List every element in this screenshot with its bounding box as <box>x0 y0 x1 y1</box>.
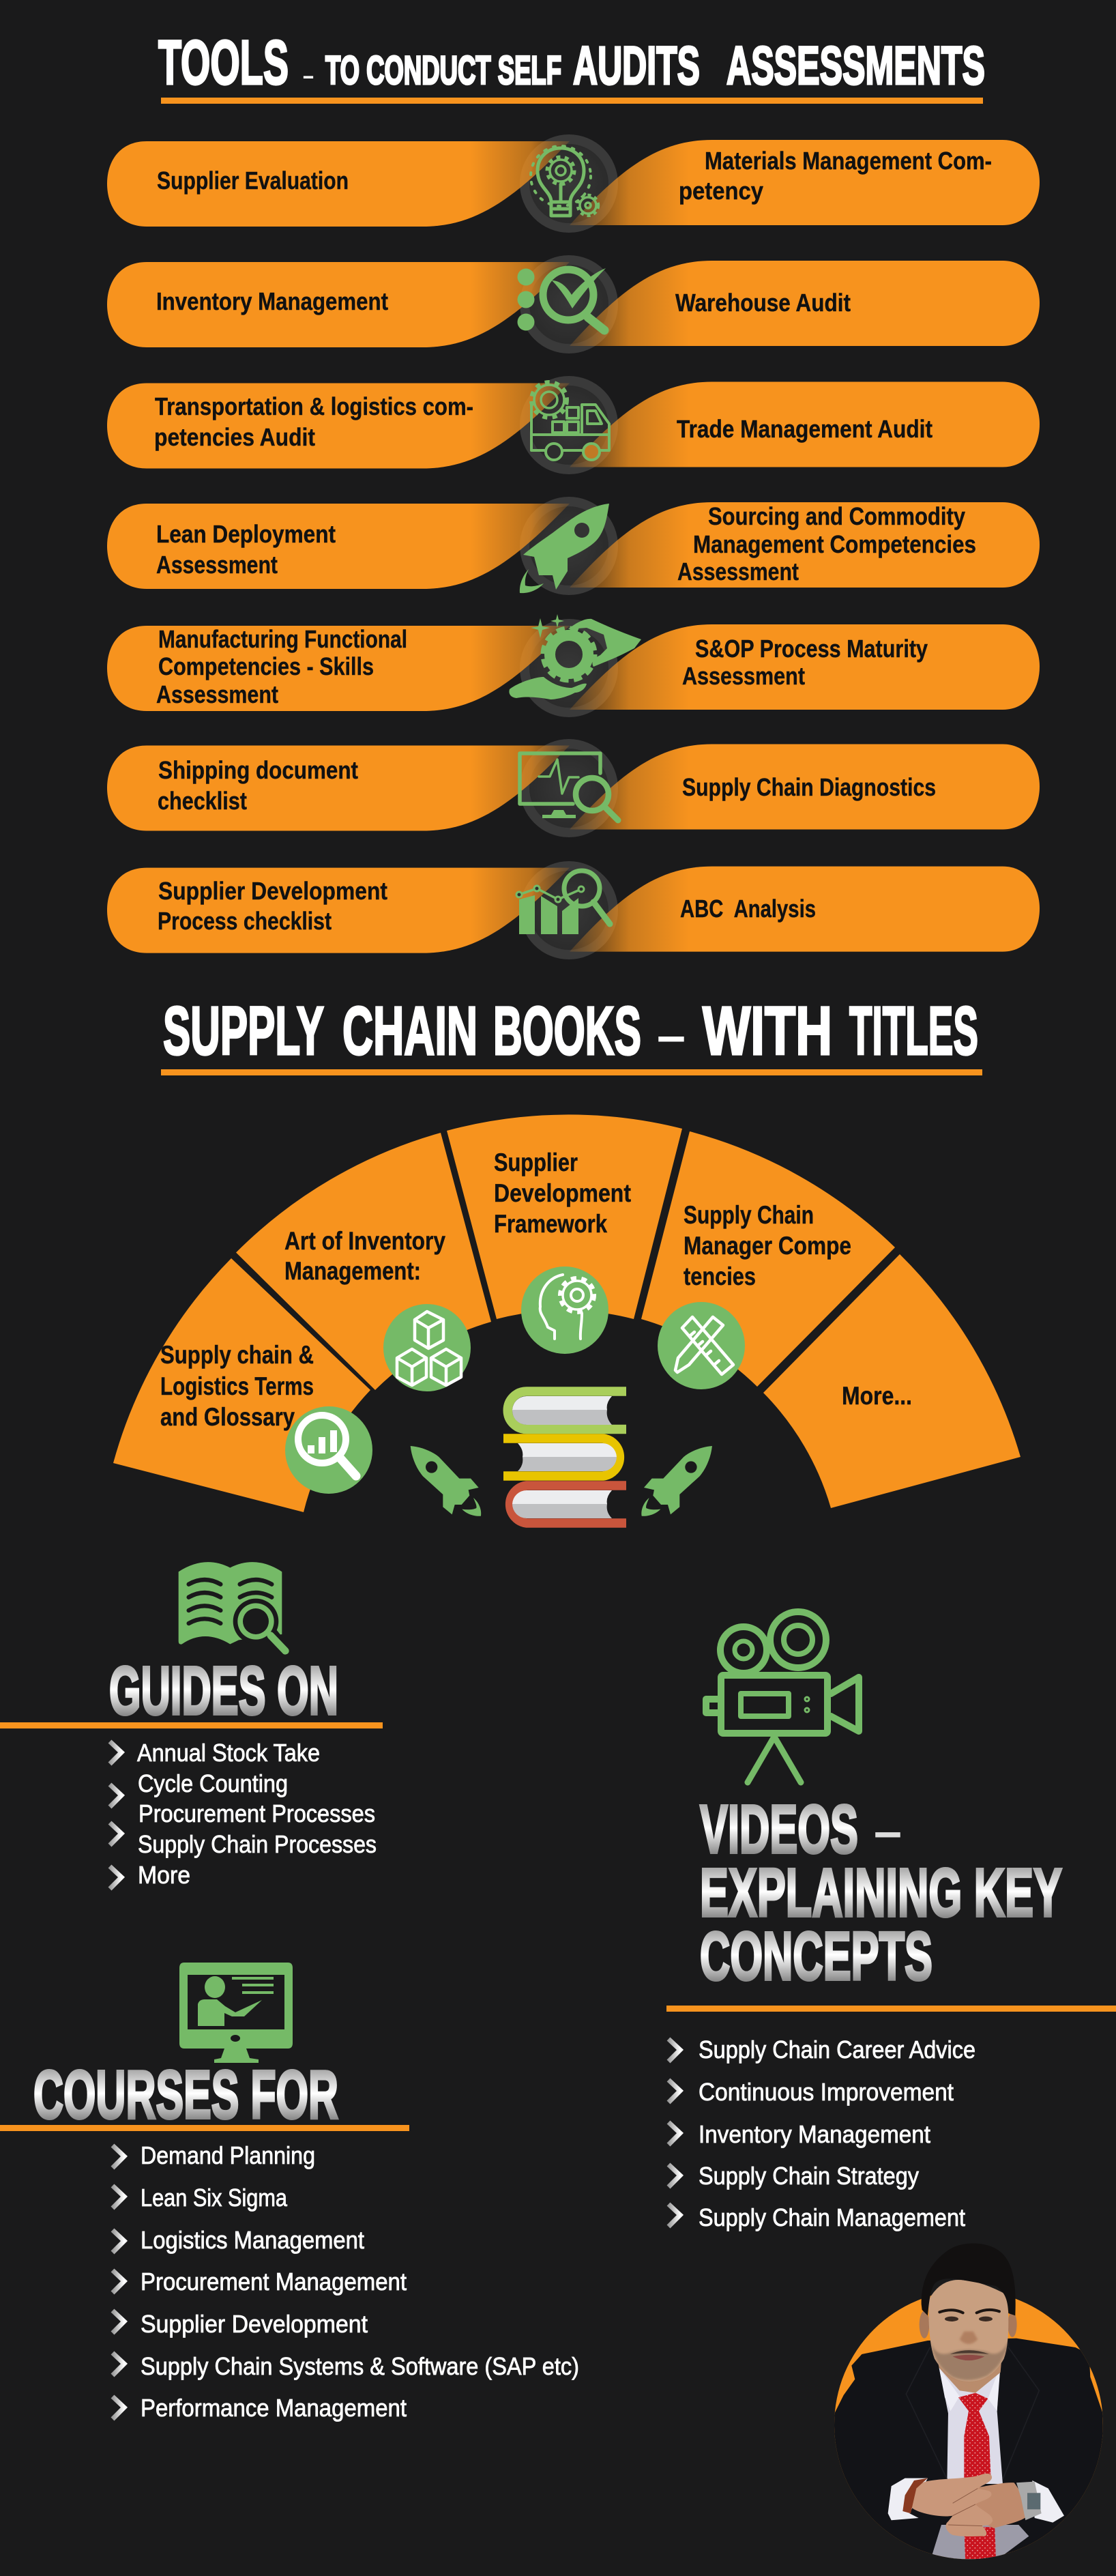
text: trade management audit: Trade Management Audit <box>677 415 933 443</box>
list: courses: Logistics Management <box>141 2226 364 2254</box>
panel: videos <box>666 1612 1116 2231</box>
list: courses: Supply Chain Systems & Software (SAP etc) <box>141 2352 579 2380</box>
pill: materials management <box>570 140 1040 225</box>
pill: manufacturing <box>107 626 570 711</box>
panel: guides <box>0 1562 383 1889</box>
row 3: transportation and trade management <box>107 376 1040 474</box>
segment: supply chain terms: Supply chain & <box>160 1341 314 1369</box>
pill: transportation <box>107 383 570 468</box>
pill: diagnostics <box>570 744 1040 830</box>
text: supplier development process checklist: Supplier Development <box>158 877 387 905</box>
segment: supply chain terms <box>113 1258 370 1512</box>
row 2: inventory management and warehouse audit <box>107 255 1040 353</box>
heading: videos explaining key concepts: VIDEOS <box>700 1791 858 1868</box>
segment: supply chain manager competencies: tencies <box>684 1262 756 1290</box>
heading: courses for: COURSES FOR <box>33 2057 338 2133</box>
heading: videos explaining key concepts: – <box>874 1803 902 1859</box>
heading: supply chain books: BOOKS <box>493 993 641 1069</box>
segment: supply chain manager competencies: Supply Chain <box>684 1201 814 1229</box>
pill: lean deployment <box>107 504 570 589</box>
text: shipping document checklist: checklist <box>158 787 247 815</box>
text: lean deployment assessment <box>156 520 336 579</box>
text: transportation and logistics competencies audit: Transportation & logistics com- <box>155 392 473 420</box>
text: S&OP process maturity: S&OP Process Maturity <box>695 635 928 663</box>
text: warehouse audit: Warehouse Audit <box>675 289 851 317</box>
text: lean deployment assessment: Assessment <box>156 551 278 579</box>
segment: supply chain terms: Logistics Terms <box>160 1372 314 1400</box>
icon: crossed pencil and ruler <box>658 1302 745 1389</box>
title: tools: TO CONDUCT SELF <box>325 48 561 93</box>
text: S&OP process maturity: Assessment <box>682 662 805 690</box>
heading: supply chain books: CHAIN <box>342 993 478 1069</box>
list: guides: Cycle Counting <box>138 1769 288 1797</box>
pill: supplier evaluation <box>107 141 570 227</box>
text: shipping document checklist: Shipping document <box>158 756 358 784</box>
icon: stacked boxes <box>383 1304 471 1391</box>
heading: supply chain books: WITH <box>703 993 832 1069</box>
text: materials management competency: petency <box>679 177 763 205</box>
pill: inventory management <box>107 262 570 347</box>
panel: courses <box>0 1963 579 2422</box>
row 5: manufacturing and S&OP <box>107 614 1040 717</box>
list: guides: Supply Chain Processes <box>138 1830 377 1858</box>
heading: videos explaining key concepts <box>700 1791 1062 1995</box>
icon: movie camera <box>706 1612 859 1782</box>
text: transportation and logistics competencies audit: petencies Audit <box>154 423 315 451</box>
list: guides: More <box>138 1861 190 1889</box>
text: supply chain diagnostics: Supply Chain Diagnostics <box>682 773 936 801</box>
fan chart: supply chain books <box>113 1114 1020 1523</box>
segment: art of inventory management <box>236 1133 491 1390</box>
heading: supply chain books: – <box>657 1007 686 1065</box>
text: supplier development process checklist <box>158 877 387 935</box>
heading: guides on: GUIDES ON <box>109 1653 338 1729</box>
row 7: supplier development and ABC analysis <box>107 861 1040 959</box>
icon: presentation monitor <box>179 1963 293 2063</box>
segment: supplier development framework: Supplier <box>494 1148 578 1176</box>
icon: right rocket <box>641 1446 712 1516</box>
row 4: lean deployment and sourcing <box>107 497 1040 595</box>
list: videos: Inventory Management <box>699 2120 930 2148</box>
pill: S&OP <box>570 624 1040 710</box>
text: sourcing and commodity management: Management Competencies <box>693 530 976 558</box>
icon: truck with gear <box>531 382 609 460</box>
text: sourcing and commodity management: Assessment <box>677 558 799 585</box>
segment: art of inventory management: Art of Inventory <box>284 1227 445 1255</box>
segment: more: More... <box>842 1382 912 1410</box>
title: tools: TOOLS <box>158 28 289 98</box>
segment: supplier development framework: Development <box>494 1179 631 1207</box>
icon: light bulb with gears <box>531 146 598 216</box>
segment: supply chain terms: and Glossary <box>160 1403 295 1431</box>
text: supplier evaluation: Supplier Evaluation <box>157 167 349 194</box>
icon: bars with magnifier <box>516 871 610 934</box>
list: videos: Supply Chain Strategy <box>699 2162 919 2190</box>
heading: supply chain books: TITLES <box>849 993 978 1069</box>
text: inventory management: Inventory Management <box>156 287 388 315</box>
list: courses: Performance Management <box>141 2394 407 2422</box>
text: transportation and logistics competencies audit <box>154 392 473 451</box>
pill: supplier development <box>107 868 570 953</box>
icon: open book with magnifier <box>179 1562 285 1651</box>
list: courses: Lean Six Sigma <box>141 2184 288 2212</box>
list: videos: Supply Chain Career Advice <box>699 2036 975 2064</box>
pill: ABC analysis <box>570 867 1040 952</box>
title: tools <box>158 28 985 98</box>
text: materials management competency <box>679 147 992 205</box>
segment: art of inventory management: Management: <box>284 1257 421 1285</box>
pill: warehouse audit <box>570 261 1040 346</box>
heading: videos explaining key concepts: CONCEPTS <box>700 1918 933 1995</box>
icon: left rocket <box>411 1446 481 1516</box>
icon: monitor with magnifier <box>520 753 618 820</box>
segment: supplier development framework <box>447 1114 682 1319</box>
list: courses: Demand Planning <box>141 2141 315 2169</box>
icon: magnifier with bars <box>285 1406 372 1494</box>
row 1: supplier evaluation and materials management <box>107 134 1040 233</box>
text: S&OP process maturity <box>682 635 928 690</box>
icon: hands holding gear <box>509 614 641 699</box>
text: manufacturing functional competencies: Competencies - Skills <box>158 652 374 680</box>
text: manufacturing functional competencies: Assessment <box>156 680 278 708</box>
list: guides: Annual Stock Take <box>137 1739 320 1767</box>
segment: supply chain manager competencies <box>641 1131 895 1387</box>
title: tools: AUDITS <box>573 35 700 96</box>
list: videos: Supply Chain Management <box>699 2203 965 2231</box>
list: videos <box>669 2036 975 2231</box>
row 6: shipping document and diagnostics <box>107 739 1040 837</box>
text: manufacturing functional competencies: Manufacturing Functional <box>158 625 407 653</box>
heading: supply chain books <box>163 993 978 1069</box>
pill: shipping document <box>107 745 570 831</box>
segment: more <box>763 1254 1020 1508</box>
list: courses: Supplier Development <box>141 2310 368 2338</box>
text: lean deployment assessment: Lean Deployment <box>156 520 336 548</box>
list: courses <box>113 2141 579 2422</box>
text: manufacturing functional competencies <box>156 625 407 708</box>
text: shipping document checklist <box>158 756 358 815</box>
list: guides: Procurement Processes <box>138 1799 375 1827</box>
pill: sourcing <box>570 502 1040 588</box>
list: courses: Procurement Management <box>141 2268 407 2296</box>
text: supplier development process checklist: Process checklist <box>158 907 332 935</box>
heading: supply chain books: SUPPLY <box>163 993 324 1069</box>
icon: magnifier with check <box>517 268 606 330</box>
list: videos: Continuous Improvement <box>699 2078 954 2106</box>
segment: supplier development framework: Framework <box>494 1210 607 1238</box>
portrait: presenter in suit over orange circle <box>832 2243 1105 2564</box>
icon: stack of books <box>503 1391 626 1523</box>
list: guides <box>110 1739 377 1889</box>
segment: supply chain manager competencies: Manager Compe <box>684 1232 851 1260</box>
text: ABC analysis: ABC Analysis <box>680 895 816 923</box>
title: tools: – <box>303 61 314 89</box>
pill: trade management <box>570 382 1040 467</box>
text: sourcing and commodity management: Sourcing and Commodity <box>708 502 965 530</box>
text: sourcing and commodity management <box>677 502 976 585</box>
text: materials management competency: Materials Management Com- <box>705 147 992 175</box>
icon: head with gear <box>521 1267 608 1354</box>
icon: rocket <box>520 504 609 593</box>
